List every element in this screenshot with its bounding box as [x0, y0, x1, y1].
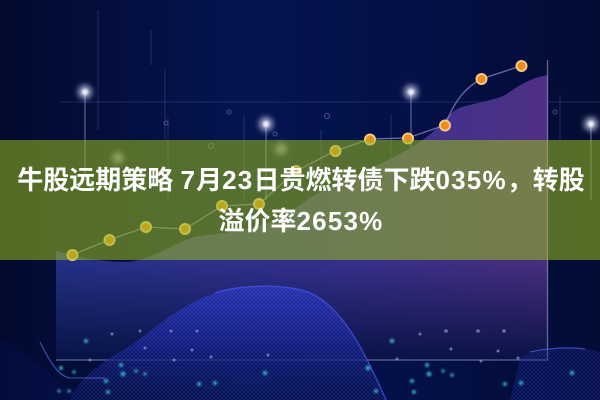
- line chart connector: [72, 66, 521, 255]
- title: 牛股远期策略 7月23日贵燃转债下跌035%，转股: [17, 165, 585, 195]
- faint grid lines and glowing light posts: [60, 10, 600, 200]
- title: [17, 165, 585, 236]
- mesh wave hills: [0, 286, 600, 400]
- title: 溢价率2653%: [218, 206, 383, 236]
- teal particle dots: [57, 329, 574, 394]
- green title band: [0, 140, 600, 260]
- line chart data points: [68, 61, 526, 260]
- purple area chart: [56, 60, 548, 360]
